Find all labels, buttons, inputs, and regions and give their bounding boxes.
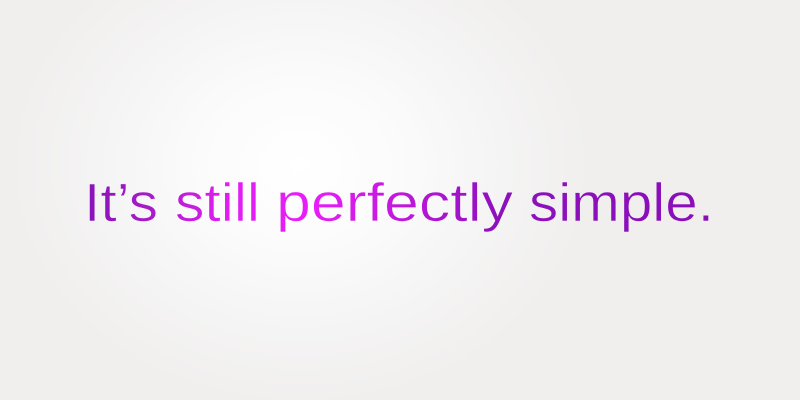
title text: It’s: [84, 173, 158, 233]
title text: simple.: [529, 173, 714, 233]
title text: still: [175, 173, 260, 233]
title text: [84, 173, 714, 233]
title text: perfectly: [276, 173, 513, 233]
